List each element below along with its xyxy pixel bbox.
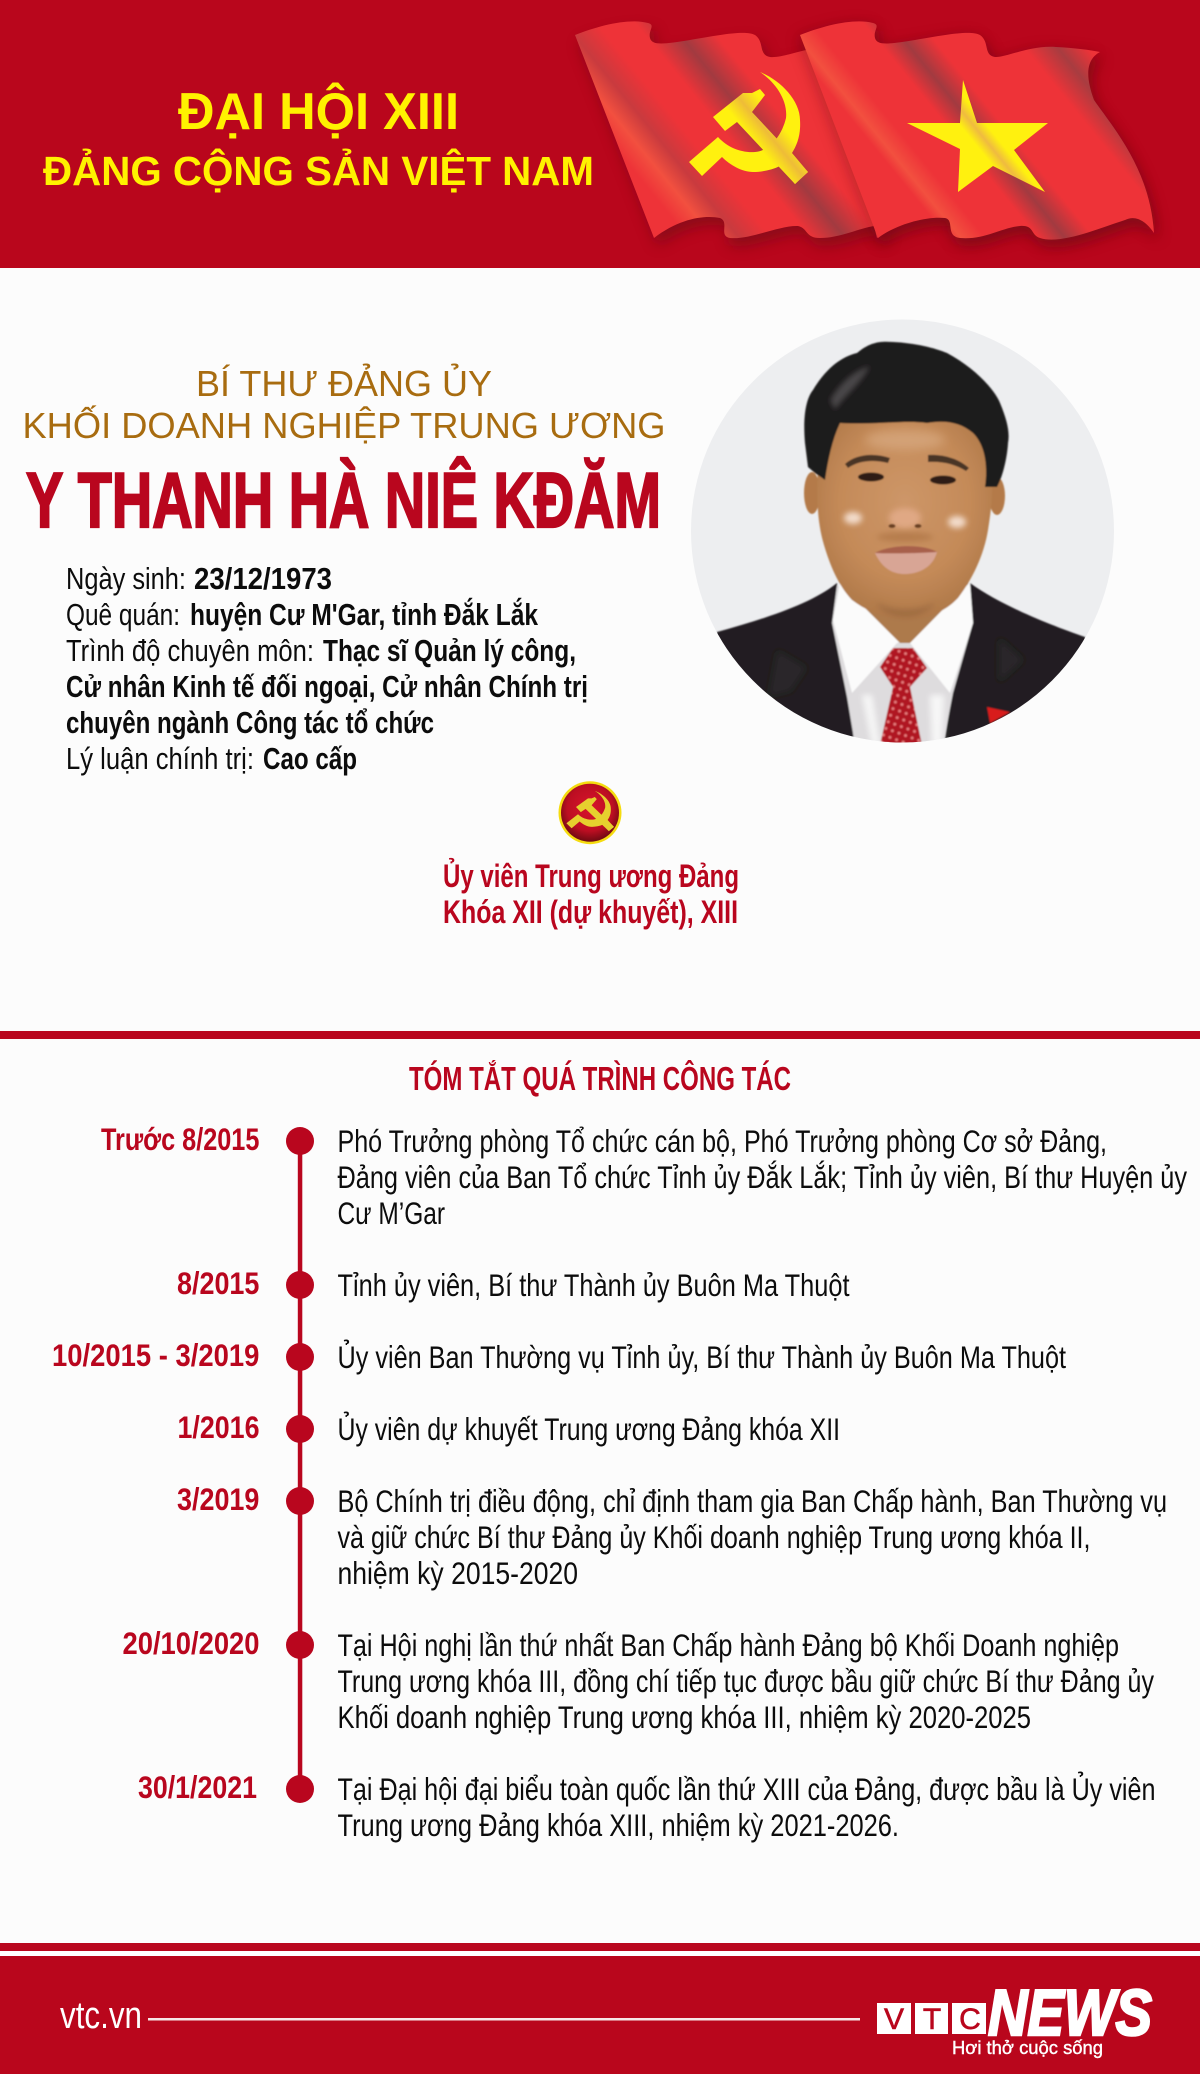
footer xyxy=(0,1951,1200,2074)
logo: VTC News: Hơi thở cuộc sống xyxy=(952,2038,1103,2058)
timeline entry: 3/2019: 3/2019 xyxy=(177,1481,259,1517)
timeline entry: 8/2015: 8/2015 xyxy=(177,1265,259,1301)
mouth xyxy=(875,548,937,574)
timeline entry: 20/10/2020 xyxy=(122,1625,1154,1735)
footer divider xyxy=(0,1943,1200,1951)
eyes xyxy=(858,472,884,482)
logo: VTC News: T xyxy=(923,2003,941,2036)
section heading: TÓM TẮT QUÁ TRÌNH CÔNG TÁC xyxy=(409,1059,791,1097)
logo: VTC News: NEWS xyxy=(988,1976,1152,2049)
timeline entry: Trước 8/2015: Trước 8/2015 xyxy=(101,1121,259,1157)
central committee membership: Khóa XII (dự khuyết), XIII xyxy=(443,894,738,930)
chin shadow xyxy=(880,606,930,618)
central committee membership xyxy=(443,858,739,930)
timeline entry: 20/10/2020: 20/10/2020 xyxy=(122,1625,260,1661)
position subtitle: KHỐI DOANH NGHIỆP TRUNG ƯƠNG xyxy=(22,404,666,446)
header banner xyxy=(0,0,1200,268)
neck xyxy=(866,583,968,644)
timeline entry: 1/2016: Ủy viên dự khuyết Trung ương Đảng khóa XII xyxy=(338,1411,840,1447)
biography details: huyện Cư M'Gar, tỉnh Đắk Lắk xyxy=(190,596,538,632)
timeline entry: 30/1/2021: 30/1/2021 xyxy=(138,1769,257,1805)
timeline entry: 8/2015 xyxy=(177,1265,850,1303)
logo: VTC News xyxy=(877,1976,1152,2058)
logo: VTC News: C xyxy=(959,2003,981,2036)
biography details: Thạc sĩ Quản lý công, xyxy=(323,634,576,668)
title xyxy=(43,82,594,194)
position subtitle: BÍ THƯ ĐẢNG ỦY xyxy=(196,362,492,404)
timeline entry: 3/2019: nhiệm kỳ 2015-2020 xyxy=(338,1555,578,1591)
shirt collar xyxy=(833,583,905,693)
timeline entry: 20/10/2020: Khối doanh nghiệp Trung ương khóa III, nhiệm kỳ 2020-2025 xyxy=(338,1699,1031,1735)
eyebrows xyxy=(845,455,890,468)
shirt xyxy=(832,583,973,745)
nose xyxy=(888,524,896,528)
person name: Y THANH HÀ NIÊ KĐĂM xyxy=(26,456,661,544)
ears xyxy=(804,472,820,514)
icon: hammer and sickle xyxy=(689,72,808,184)
timeline entry: 10/2015 - 3/2019: 10/2015 - 3/2019 xyxy=(52,1337,259,1373)
skin highlights xyxy=(844,512,862,524)
suit xyxy=(716,582,1086,738)
timeline entry: 3/2019 xyxy=(177,1481,1167,1591)
portrait photo xyxy=(691,320,1114,742)
necktie xyxy=(880,648,927,745)
logo: VTC News: V xyxy=(884,2003,904,2036)
biography details: Trình độ chuyên môn: xyxy=(66,634,314,668)
biography details: 23/12/1973 xyxy=(194,562,332,596)
biography details xyxy=(66,562,588,776)
face xyxy=(817,417,992,620)
timeline entry: Trước 8/2015 xyxy=(101,1121,1187,1231)
timeline axis xyxy=(298,1141,302,1789)
source site: vtc.vn xyxy=(60,1995,142,2037)
section divider xyxy=(0,1031,1200,1039)
lapel pin flag xyxy=(987,707,1010,723)
biography details: Cử nhân Kinh tế đối ngoại, Cử nhân Chính trị xyxy=(66,670,588,704)
title: ĐẢNG CỘNG SẢN VIỆT NAM xyxy=(43,148,594,194)
hair xyxy=(804,342,1009,487)
position subtitle xyxy=(22,362,666,446)
biography details: Ngày sinh: xyxy=(66,562,186,596)
biography details: Cao cấp xyxy=(263,742,357,776)
icon: party emblem badge xyxy=(558,781,622,844)
timeline entry: 1/2016: 1/2016 xyxy=(178,1409,260,1445)
title: ĐẠI HỘI XIII xyxy=(178,82,459,141)
icon: yellow star xyxy=(907,80,1048,192)
biography details: Quê quán: xyxy=(66,598,180,632)
timeline entry: 30/1/2021 xyxy=(138,1769,1156,1843)
biography details: Lý luận chính trị: xyxy=(66,742,254,776)
illustration: waving party flag and national flag xyxy=(575,21,1158,248)
timeline entry: 8/2015: Tỉnh ủy viên, Bí thư Thành ủy Buôn Ma Thuột xyxy=(338,1267,850,1303)
timeline entry: 1/2016 xyxy=(178,1409,840,1447)
biography details: chuyên ngành Công tác tổ chức xyxy=(66,706,434,740)
timeline entry: 10/2015 - 3/2019 xyxy=(52,1337,1066,1375)
timeline entry: Trước 8/2015: Cư M’Gar xyxy=(338,1195,445,1231)
timeline entry: 30/1/2021: Trung ương Đảng khóa XIII, nhiệm kỳ 2021-2026. xyxy=(338,1807,899,1843)
career timeline xyxy=(52,1121,1187,1843)
central committee membership: Ủy viên Trung ương Đảng xyxy=(443,858,739,894)
